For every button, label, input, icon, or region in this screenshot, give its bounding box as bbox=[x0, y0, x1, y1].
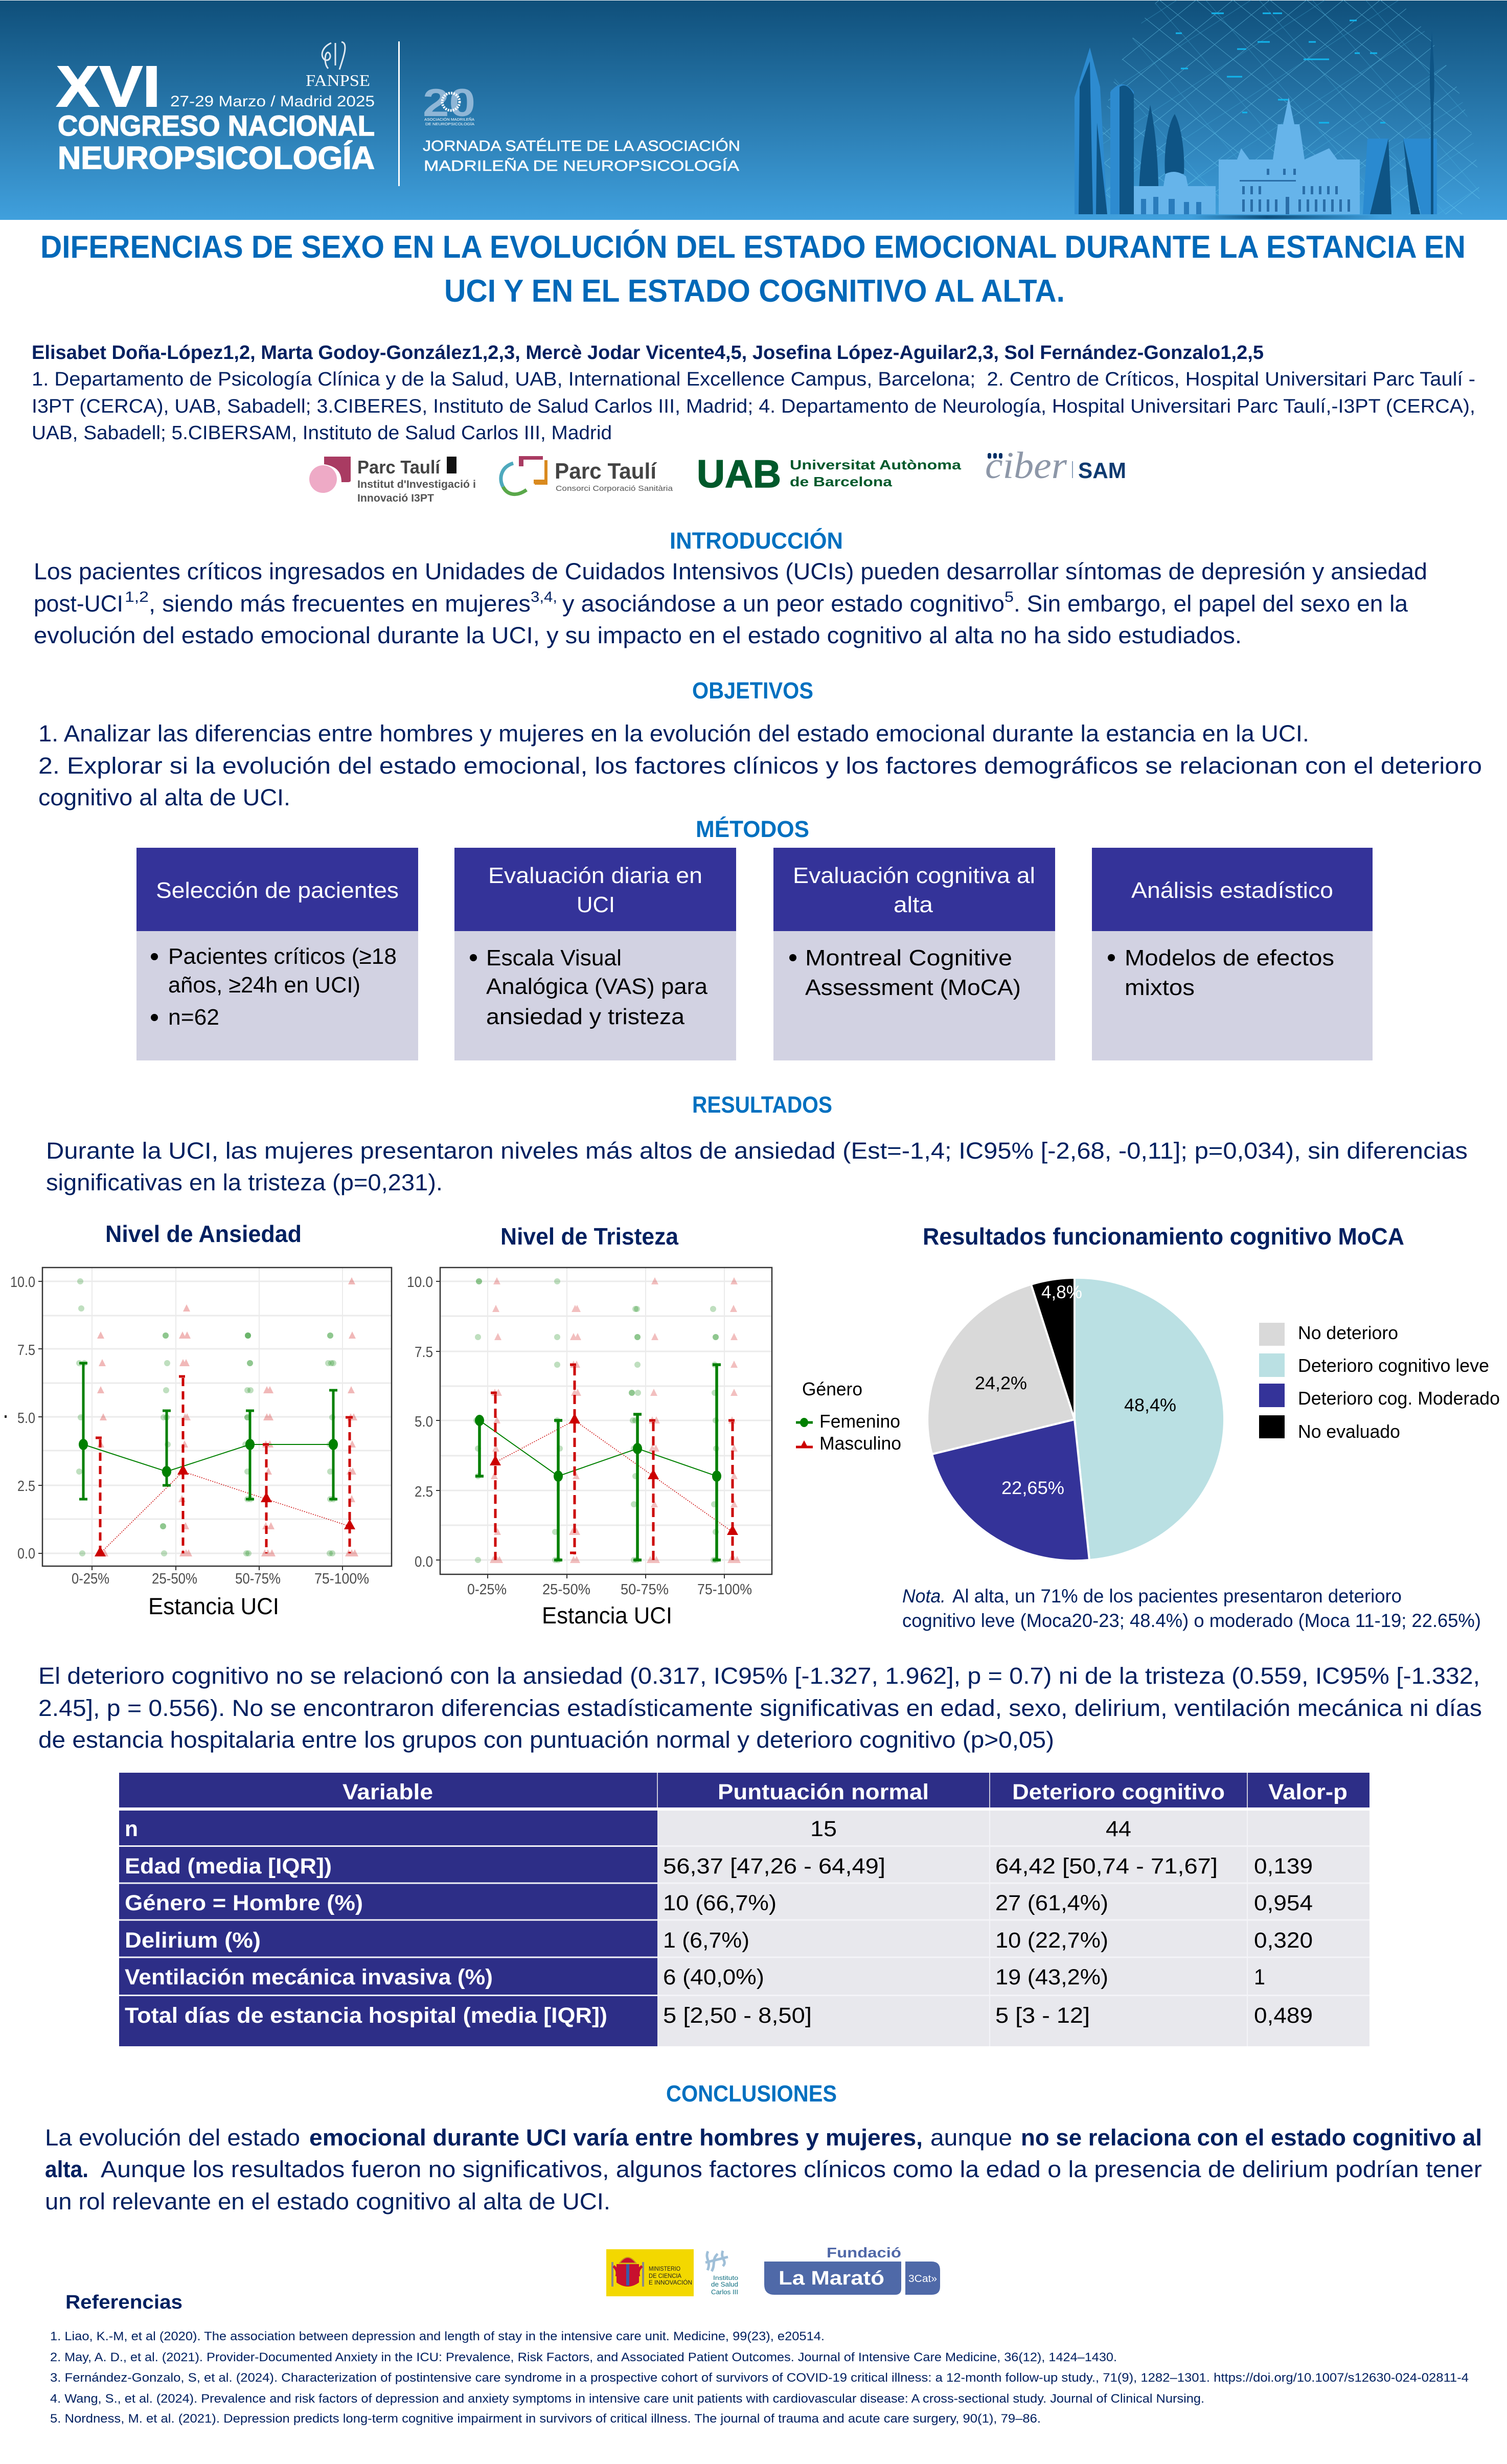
pie chart: MoCA: 48,4% bbox=[1124, 1395, 1176, 1415]
mean markers bbox=[475, 1415, 721, 1482]
panel: evaluación cognitiva al alta: Montreal Cognitive bbox=[805, 945, 1012, 970]
logo: CIBER SAM: ciber bbox=[985, 445, 1067, 487]
panel: selección de pacientes: Selección de pacientes bbox=[156, 878, 399, 903]
congress logo: XVI: 27-29 Marzo / Madrid 2025 bbox=[170, 93, 375, 110]
row: n bbox=[125, 1817, 1131, 1841]
chart title: ansiedad: Nivel de Ansiedad bbox=[105, 1220, 302, 1247]
pie chart: MoCA bbox=[927, 1278, 1224, 1561]
row: ventilación: 19 (43,2%) bbox=[995, 1965, 1108, 1990]
spire bbox=[1430, 31, 1434, 214]
title: DIFERENCIAS DE SEXO EN LA EVOLUCIÓN DEL ESTADO EMOCIONAL DURANTE LA ESTANCIA EN bbox=[40, 230, 1466, 265]
logo: CIBER SAM bbox=[985, 445, 1126, 487]
congress logo: XVI: NEUROPSICOLOGÍA bbox=[58, 141, 375, 176]
slim towers bbox=[1139, 105, 1158, 214]
references list: 2. May, A. D., et al. (2021). Provider-Documented Anxiety in the ICU: Prevalence, Risk Factors, and Associated Patient Outcomes. Journal of Intensive Care Medicine, 36(12), 1424–1430. bbox=[50, 2350, 1117, 2364]
pie chart: MoCA: 24,2% bbox=[975, 1373, 1027, 1393]
panel: evaluación diaria en UCI: Escala Visual bbox=[486, 945, 622, 970]
heading: métodos: MÉTODOS bbox=[696, 816, 809, 842]
row: edad: 0,139 bbox=[1254, 1854, 1313, 1879]
logo: Parc Taulí consorci: Consorci Corporació Sanitària bbox=[556, 484, 673, 493]
note: Nota. bbox=[902, 1586, 946, 1607]
panel: análisis estadístico: Modelos de efectos bbox=[1125, 945, 1334, 970]
text block: introduction bbox=[34, 558, 1427, 648]
logos row bbox=[309, 445, 1126, 504]
table header: Deterioro cognitivo bbox=[1012, 1780, 1225, 1804]
text block: cognitive deterioration: de estancia hospitalaria entre los grupos con puntuación normal y deterioro cognitivo (p>0,05) bbox=[38, 1727, 1054, 1753]
references list: 3. Fernández-Gonzalo, S, et al. (2024). Characterization of postintensive care syndrome in a prospective cohort of survivors of COVID-19 critical illness: a 12-month follow-up study., 71(9), 1282–1301. https://doi.org/10.1007/s12630-024-02811-4 bbox=[50, 2371, 1469, 2385]
logo: Instituto de Salud Carlos III: Instituto bbox=[713, 2274, 738, 2281]
panel: evaluación cognitiva al alta bbox=[773, 848, 1055, 1060]
legend: género: Género bbox=[802, 1378, 862, 1399]
legend: MoCA: No deterioro bbox=[1298, 1322, 1398, 1343]
satellite session text: JORNADA SATÉLITE DE LA ASOCIACIÓN bbox=[423, 138, 740, 154]
row: delirium: 10 (22,7%) bbox=[995, 1928, 1108, 1953]
text block: introduction: evolución del estado emocional durante la UCI, y su impacto en el estado cognitivo al alta no ha sido estudiados. bbox=[34, 622, 1242, 648]
congress logo: XVI bbox=[56, 54, 375, 176]
axis labels: 25-50% bbox=[542, 1581, 590, 1598]
panel: selección de pacientes: n=62 bbox=[168, 1005, 219, 1030]
row: edad: 56,37 [47,26 - 64,49] bbox=[663, 1854, 885, 1879]
raw points masculino bbox=[97, 1277, 358, 1556]
funder logos bbox=[606, 2245, 940, 2296]
Kio towers bbox=[1363, 139, 1389, 214]
row: n: 15 bbox=[810, 1817, 837, 1841]
row: delirium: 0,320 bbox=[1254, 1928, 1313, 1953]
domed building bbox=[1134, 172, 1216, 214]
axis labels: 7.5 bbox=[17, 1342, 35, 1359]
text block: introduction: post-UCI bbox=[34, 591, 123, 617]
text block: introduction: 1,2 bbox=[125, 589, 149, 605]
logo: Fundació La Marató: La Marató bbox=[779, 2268, 884, 2289]
legend: MoCA: Deterioro cog. Moderado bbox=[1298, 1388, 1500, 1409]
title: UCI Y EN EL ESTADO COGNITIVO AL ALTA. bbox=[444, 274, 1065, 309]
row: género: 0,954 bbox=[1254, 1891, 1313, 1915]
logo: UAB: de Barcelona bbox=[790, 474, 893, 489]
row: días de estancia: 5 [3 - 12] bbox=[995, 2003, 1090, 2028]
text block: conclusions: La evolución del estado bbox=[45, 2124, 300, 2151]
text block: conclusions: no se relaciona con el estado cognitivo al bbox=[1021, 2124, 1482, 2151]
row: días de estancia bbox=[125, 2003, 1313, 2028]
row: días de estancia: 5 [2,50 - 8,50] bbox=[663, 2003, 812, 2028]
logo: Parc Taulí I3PT bbox=[309, 457, 476, 504]
panel: selección de pacientes: Pacientes críticos (≥18 bbox=[168, 944, 397, 969]
panel: evaluación diaria en UCI: ansiedad y tristeza bbox=[486, 1004, 685, 1029]
legend: MoCA bbox=[1259, 1322, 1500, 1442]
heading: referencias: Referencias bbox=[65, 2292, 182, 2313]
axis labels: 75-100% bbox=[697, 1581, 752, 1598]
congress logo: XVI: XVI bbox=[56, 54, 161, 119]
error bars masculino bbox=[100, 1378, 350, 1553]
table row backgrounds bbox=[119, 1811, 1369, 2046]
logo: Parc Taulí I3PT: Innovació I3PT bbox=[357, 492, 434, 504]
illustration: Madrid skyline with network mesh bbox=[1074, 0, 1507, 219]
ground shadow bbox=[1192, 215, 1379, 219]
axis labels: 0.0 bbox=[415, 1554, 433, 1570]
row: n: n bbox=[125, 1817, 138, 1841]
logo: Instituto de Salud Carlos III bbox=[705, 2251, 738, 2296]
text block: objectives: 1. Analizar las diferencias entre hombres y mujeres en la evolución del estado emocional durante la estancia en la UCI. bbox=[38, 720, 1309, 747]
panel: análisis estadístico bbox=[1092, 848, 1373, 1060]
affiliations: 1. Departamento de Psicología Clínica y de la Salud, UAB, International Excellence Campus, Barcelona; 2. Centro de Críticos, Hospital Universitari Parc Taulí - bbox=[32, 369, 1475, 390]
heading: objetivos: OBJETIVOS bbox=[692, 677, 813, 704]
text block: cognitive deterioration bbox=[38, 1663, 1482, 1753]
error bars femenino bbox=[475, 1365, 721, 1560]
text block: conclusions: Aunque los resultados fueron no significativos, algunos factores clínicos como la edad o la presencia de delirium podrían tener bbox=[101, 2156, 1482, 2182]
mean lines bbox=[83, 1444, 333, 1472]
row: ventilación bbox=[125, 1965, 1265, 1990]
x-axis title: tristeza: Estancia UCI bbox=[542, 1602, 672, 1629]
pie chart: MoCA: 4,8% bbox=[1041, 1282, 1082, 1302]
palace bbox=[1219, 97, 1360, 214]
panel: evaluación diaria en UCI: UCI bbox=[577, 892, 615, 917]
axis labels: 7.5 bbox=[415, 1344, 433, 1361]
legend: MoCA: No evaluado bbox=[1298, 1421, 1400, 1442]
row: días de estancia: Total días de estancia hospital (media [IQR]) bbox=[125, 2003, 607, 2028]
references list: 1. Liao, K.-M, et al (2020). The association between depression and length of stay in the intensive care unit. Medicine, 99(23), e20514. bbox=[50, 2330, 825, 2343]
note: cognitivo leve (Moca20-23; 48.4%) o moderado (Moca 11-19; 22.65%) bbox=[902, 1610, 1481, 1631]
row: género: Género = Hombre (%) bbox=[125, 1891, 363, 1915]
axis labels: 10.0 bbox=[407, 1274, 433, 1291]
table header: Puntuación normal bbox=[718, 1780, 929, 1804]
pie chart: MoCA: 22,65% bbox=[1001, 1478, 1064, 1498]
icon: FANPSE logo bbox=[306, 42, 370, 89]
text block: objectives: cognitivo al alta de UCI. bbox=[38, 784, 290, 810]
logo: Instituto de Salud Carlos III: Carlos III bbox=[711, 2288, 738, 2296]
panel: evaluación cognitiva al alta: alta bbox=[894, 892, 933, 917]
logo: Instituto de Salud Carlos III: de Salud bbox=[711, 2280, 738, 2288]
row: edad: 64,42 [50,74 - 71,67] bbox=[995, 1854, 1218, 1879]
axis labels: 50-75% bbox=[235, 1571, 281, 1587]
affiliations bbox=[32, 369, 1475, 444]
error bars femenino bbox=[79, 1363, 337, 1499]
logo: UAB: Universitat Autònoma bbox=[790, 457, 962, 472]
logo: Ministerio de Ciencia: DE CIENCIA bbox=[649, 2272, 681, 2279]
logo: CIBER SAM: SAM bbox=[1078, 458, 1126, 483]
logo: Fundació La Marató: Fundació bbox=[827, 2245, 901, 2260]
panel: selección de pacientes bbox=[136, 848, 418, 1060]
axis labels bbox=[10, 1274, 369, 1587]
mean markers bbox=[79, 1439, 338, 1477]
axis labels: 2.5 bbox=[415, 1484, 433, 1500]
note bbox=[902, 1586, 1481, 1631]
text block: introduction: . Sin embargo, el papel del sexo en la bbox=[1014, 591, 1408, 617]
text block: introduction: , siendo más frecuentes en mujeres bbox=[149, 591, 531, 617]
text block: conclusions: aunque bbox=[930, 2124, 1012, 2151]
row: días de estancia: 0,489 bbox=[1254, 2003, 1313, 2028]
axis labels: 0-25% bbox=[72, 1571, 109, 1587]
logo: Parc Taulí I3PT: Institut d'Investigació i bbox=[357, 479, 476, 490]
mean lines bbox=[480, 1420, 717, 1476]
table header: Variable bbox=[342, 1780, 433, 1804]
x-axis title: ansiedad: Estancia UCI bbox=[148, 1593, 279, 1619]
axis labels: 0.0 bbox=[17, 1546, 35, 1562]
tower 2 bbox=[1110, 84, 1134, 214]
logo: Fundació La Marató bbox=[764, 2245, 940, 2295]
axis labels: 75-100% bbox=[314, 1571, 369, 1587]
panel: evaluación diaria en UCI: Evaluación diaria en bbox=[488, 863, 702, 888]
divider line bbox=[398, 41, 400, 186]
table header: Valor-p bbox=[1268, 1780, 1348, 1804]
text block: conclusions bbox=[45, 2124, 1482, 2214]
raw points femenino bbox=[76, 1278, 336, 1556]
title bbox=[40, 230, 1466, 309]
text block: objectives: 2. Explorar si la evolución del estado emocional, los factores clínicos y los factores demográficos se relacionan con el deterioro bbox=[38, 753, 1482, 779]
tower 1 bbox=[1075, 48, 1107, 214]
logo: UAB: UAB bbox=[697, 453, 781, 496]
row: género: 27 (61,4%) bbox=[995, 1891, 1108, 1915]
panel: selección de pacientes: años, ≥24h en UCI) bbox=[168, 973, 360, 998]
row: delirium bbox=[125, 1928, 1313, 1953]
satellite session text: MADRILEÑA DE NEUROPSICOLOGÍA bbox=[424, 157, 740, 174]
references list: 4. Wang, S., et al. (2024). Prevalence and risk factors of depression and anxiety symptoms in intensive care unit patients with cardiovascular disease: A cross-sectional study. Journal of Clinical Nursing. bbox=[50, 2392, 1204, 2406]
row: edad bbox=[125, 1854, 1313, 1879]
icon: 20 anniversary logo: ASOCIACIÓN MADRILEÑA bbox=[424, 117, 474, 122]
panel: evaluación cognitiva al alta: Assessment (MoCA) bbox=[805, 975, 1021, 1000]
text block: cognitive deterioration: 2.45], p = 0.556). No se encontraron diferencias estadísticamente significativas en edad, sexo, delirium, ventilación mecánica ni días bbox=[38, 1695, 1482, 1721]
legend: género bbox=[796, 1378, 901, 1454]
axis labels: 10.0 bbox=[10, 1274, 35, 1291]
axis labels bbox=[407, 1274, 752, 1598]
authors: Elisabet Doña-López1,2, Marta Godoy-González1,2,3, Mercè Jodar Vicente4,5, Josefina López-Aguilar2,3, Sol Fernández-Gonzalo1,2,5 bbox=[32, 342, 1264, 364]
text block: introduction: 3,4, bbox=[531, 589, 557, 605]
raw points femenino bbox=[473, 1278, 719, 1563]
panel: evaluación diaria en UCI: Analógica (VAS) para bbox=[486, 974, 708, 999]
table header bbox=[119, 1773, 1369, 1807]
logo: Fundació La Marató: 3Cat» bbox=[908, 2273, 937, 2285]
row: delirium: Delirium (%) bbox=[125, 1928, 261, 1953]
row: ventilación: 6 (40,0%) bbox=[663, 1965, 764, 1990]
icon: 20 anniversary logo: DE NEUROPSICOLOGÍA bbox=[425, 122, 474, 126]
legend: género: Masculino bbox=[819, 1433, 901, 1454]
row: género: 10 (66,7%) bbox=[663, 1891, 777, 1915]
panel: análisis estadístico: mixtos bbox=[1125, 975, 1195, 1000]
header banner bbox=[0, 0, 1507, 220]
line chart: nivel de tristeza bbox=[407, 1268, 772, 1598]
row: n: 44 bbox=[1106, 1817, 1131, 1841]
panel: evaluación cognitiva al alta: Evaluación cognitiva al bbox=[793, 863, 1035, 888]
satellite session text bbox=[423, 138, 740, 174]
logo: Ministerio de Ciencia: E INNOVACIÓN bbox=[649, 2278, 692, 2286]
references list bbox=[50, 2330, 1469, 2426]
panel: evaluación diaria en UCI bbox=[454, 848, 736, 1060]
legend: MoCA: Deterioro cognitivo leve bbox=[1298, 1355, 1489, 1376]
text block: conclusions: un rol relevante en el estado cognitivo al alta de UCI. bbox=[45, 2188, 610, 2214]
icon: FANPSE logo: FANPSE bbox=[306, 71, 370, 89]
row: ventilación: 1 bbox=[1254, 1965, 1265, 1990]
logo: Parc Taulí consorci: Parc Taulí bbox=[555, 459, 657, 484]
note: Al alta, un 71% de los pacientes presentaron deterioro bbox=[952, 1586, 1402, 1607]
text block: results summary: significativas en la tristeza (p=0,231). bbox=[46, 1169, 443, 1195]
panel: análisis estadístico: Análisis estadístico bbox=[1131, 878, 1333, 903]
text block: objectives bbox=[38, 720, 1482, 810]
axis labels: 5.0 bbox=[17, 1410, 35, 1427]
logo: Ministerio de Ciencia: MINISTERIO bbox=[649, 2265, 680, 2272]
row: delirium: 1 (6,7%) bbox=[663, 1928, 749, 1953]
line chart: nivel de ansiedad bbox=[5, 1268, 392, 1587]
logo: UAB bbox=[697, 453, 962, 496]
axis labels: 50-75% bbox=[621, 1581, 669, 1598]
axis labels: 5.0 bbox=[415, 1414, 433, 1430]
text block: results summary bbox=[46, 1138, 1468, 1195]
heading: conclusiones: CONCLUSIONES bbox=[666, 2081, 837, 2107]
affiliations: UAB, Sabadell; 5.CIBERSAM, Instituto de Salud Carlos III, Madrid bbox=[32, 422, 612, 444]
text block: introduction: 5 bbox=[1004, 589, 1014, 605]
raw points masculino bbox=[490, 1277, 741, 1563]
axis labels: 2.5 bbox=[17, 1478, 35, 1495]
text block: cognitive deterioration: El deterioro cognitivo no se relacionó con la ansiedad (0.317, IC95% [-1.327, 1.962], p = 0.7) ni de la tristeza (0.559, IC95% [-1.332, bbox=[38, 1663, 1480, 1689]
references list: 5. Nordness, M. et al. (2021). Depression predicts long-term cognitive impairment in survivors of critical illness. The journal of trauma and acute care surgery, 90(1), 79–86. bbox=[50, 2412, 1041, 2426]
text block: introduction: y asociándose a un peor estado cognitivo bbox=[562, 591, 1004, 617]
chart title: tristeza: Nivel de Tristeza bbox=[500, 1223, 678, 1250]
logo: Parc Taulí consorci bbox=[501, 456, 673, 494]
text block: results summary: Durante la UCI, las mujeres presentaron niveles más altos de ansiedad (Est=-1,4; IC95% [-2,68, -0,11]; p=0,034), sin diferencias bbox=[46, 1138, 1468, 1164]
row: género bbox=[125, 1891, 1313, 1915]
text block: conclusions: emocional durante UCI varía entre hombres y mujeres, bbox=[309, 2124, 923, 2151]
logo: Ministerio de Ciencia bbox=[606, 2249, 694, 2296]
text block: conclusions: alta. bbox=[45, 2156, 88, 2182]
icon: 20 anniversary logo: 20 bbox=[423, 81, 475, 125]
chart title: MoCA: Resultados funcionamiento cognitivo MoCA bbox=[923, 1223, 1404, 1250]
row: edad: Edad (media [IQR]) bbox=[125, 1854, 332, 1879]
legend: género: Femenino bbox=[819, 1411, 900, 1432]
congress logo: XVI: CONGRESO NACIONAL bbox=[58, 109, 375, 142]
row: ventilación: Ventilación mecánica invasiva (%) bbox=[125, 1965, 493, 1990]
error bars masculino bbox=[495, 1366, 733, 1560]
text block: introduction: Los pacientes críticos ingresados en Unidades de Cuidados Intensivos (UCIs) pueden desarrollar síntomas de depresión y ansiedad bbox=[34, 558, 1427, 584]
heading: introducción: INTRODUCCIÓN bbox=[670, 528, 843, 554]
axis labels: 25-50% bbox=[152, 1571, 197, 1587]
axis labels: 0-25% bbox=[467, 1581, 507, 1598]
heading: resultados: RESULTADOS bbox=[692, 1092, 832, 1118]
table: comparison bbox=[119, 1773, 1369, 2046]
affiliations: I3PT (CERCA), UAB, Sabadell; 3.CIBERES, Instituto de Salud Carlos III, Madrid; 4. Departamento de Neurología, Hospital Universitari Parc Taulí,-I3PT (CERCA), bbox=[32, 396, 1475, 417]
logo: Parc Taulí I3PT: Parc Taulí bbox=[357, 457, 441, 478]
